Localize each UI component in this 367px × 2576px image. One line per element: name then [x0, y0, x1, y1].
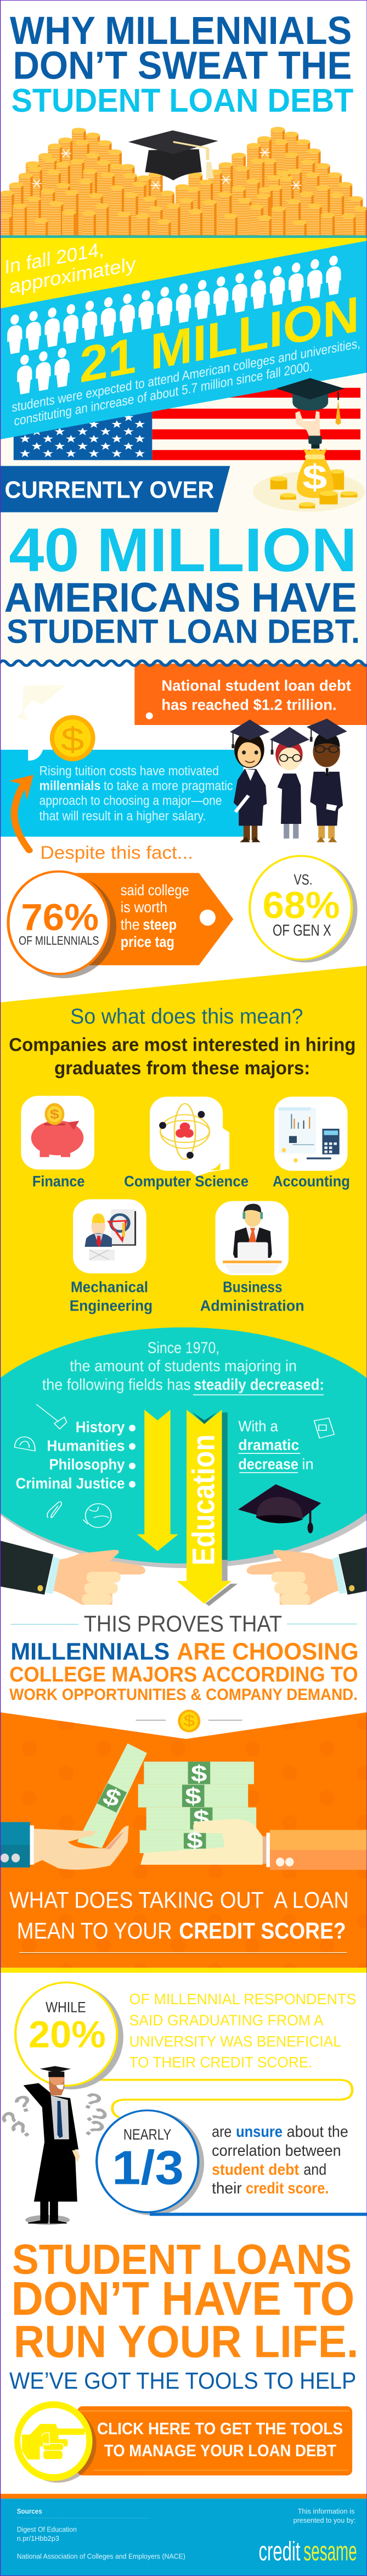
text: unsure about correlation: are — [212, 2123, 232, 2140]
stat: 76 percent tag: said college — [121, 882, 189, 899]
section: tuition and graduates — [0, 661, 367, 850]
teal dome — [0, 1328, 367, 1568]
icon: coin: $ — [61, 721, 84, 758]
stat: one third circle: 1/3 — [112, 2141, 184, 2195]
icons: outline doodles — [14, 1404, 334, 1527]
banner: currently over — [0, 466, 230, 512]
arrow: education — [177, 1410, 238, 1606]
text: of millennial respondents — [129, 1991, 356, 2071]
icon: rows of people — [7, 254, 341, 395]
icon: divider coin — [135, 1710, 242, 1732]
major: finance: Finance — [32, 1173, 84, 1190]
panel: rising tuition: millennials — [39, 778, 100, 793]
graduate three — [307, 718, 347, 842]
stat: 68 percent circle: 68% — [263, 884, 340, 926]
graduate one — [230, 720, 270, 842]
yellow diagonal band — [0, 238, 367, 309]
icon: graduation cap on coins — [128, 130, 218, 180]
text: since 1970 — [42, 1339, 324, 1395]
illustration: money exchange: $ — [187, 1828, 203, 1854]
illustration: confused graduate: ? — [76, 2115, 111, 2143]
major: finance: $ — [50, 1107, 59, 1122]
heading: so what does this mean — [9, 1004, 356, 1079]
stat: 76 percent tag: is worth — [121, 899, 167, 916]
illustration: left pointing hand — [0, 1531, 145, 1605]
illustration: money exchange: $ — [193, 1806, 210, 1832]
arrow: decreased fields — [137, 1410, 178, 1551]
stat: 76 percent tag: the — [121, 916, 140, 933]
text: with a dramatic decrease in: decrease — [238, 1456, 298, 1473]
illustration: money exchange: $ — [99, 1784, 125, 1812]
heading: student loans: DON’T HAVE TO — [11, 2272, 354, 2325]
text: in fall 2014: In fall 2014, — [5, 238, 104, 278]
stat: 20 percent circle — [15, 1982, 123, 2089]
graduate two — [270, 727, 309, 839]
illustration: confused graduate — [0, 2066, 114, 2225]
blue diagonal band — [0, 241, 367, 439]
major: mechanical engineering: Mechanical — [71, 1279, 148, 1296]
illustration: confused graduate: ? — [4, 2116, 39, 2144]
stat: one third circle: NEARLY — [123, 2126, 171, 2143]
illustration: confused graduate: ? — [77, 2087, 106, 2116]
text: unsure about correlation: student debt — [212, 2161, 299, 2178]
illustration: money bag and cap: $ — [302, 458, 327, 497]
panel: yellow majors section — [0, 966, 367, 1380]
major: computer science: Computer Science — [124, 1173, 249, 1190]
panel: national debt — [134, 663, 367, 725]
heading: millennials are choosing: MILLENNIALS — [10, 1638, 170, 1665]
text: with a dramatic decrease in — [238, 1418, 314, 1473]
section: despite this fact stats — [8, 843, 358, 978]
major: accounting — [273, 1097, 350, 1190]
illustration: confused graduate: ? — [77, 2103, 114, 2129]
text: unsure about correlation: credit score. — [246, 2179, 329, 2196]
text: with a dramatic decrease in: dramatic — [238, 1437, 299, 1453]
text: with a dramatic decrease in: With a — [238, 1418, 278, 1435]
heading: student loans — [11, 2236, 359, 2367]
stat: 76 percent tag: price tag — [121, 934, 174, 950]
title — [10, 9, 353, 119]
illustration: money exchange — [0, 1743, 367, 1870]
credit sesame logo: presented to you by: — [293, 2516, 356, 2524]
connector line — [100, 2080, 352, 2117]
illustration: money exchange: $ — [191, 1761, 207, 1787]
panel: rising tuition: Rising tuition costs have motivated — [39, 763, 219, 778]
american flag — [14, 388, 360, 460]
credit sesame logo — [258, 2507, 357, 2566]
button: click here: TO MANAGE YOUR LOAN DEBT — [104, 2442, 337, 2460]
panel: 21 million with flag — [0, 238, 367, 663]
section: title and coins — [1, 16, 367, 289]
footer — [0, 2494, 367, 2576]
list: decreased fields — [16, 1419, 135, 1492]
panel: rising tuition: that will result in a higher salary. — [39, 809, 206, 823]
stat: 68 percent circle — [250, 856, 358, 962]
arrow: orange curve — [9, 775, 33, 850]
heading: mean to your credit score: MEAN TO YOUR — [17, 1919, 172, 1944]
sources: n.pr/1Hbb2p3 — [17, 2534, 59, 2542]
icon: divider coin: $ — [184, 1712, 195, 1730]
illustration: three graduates — [230, 718, 347, 842]
text: of millennial respondents: TO THEIR CREDIT SCORE. — [129, 2054, 313, 2071]
major: computer science — [124, 1097, 249, 1190]
illustration: money exchange: $ — [185, 1784, 201, 1809]
text: despite this fact: Despite this fact... — [40, 843, 193, 863]
major: mechanical engineering: Engineering — [70, 1297, 153, 1314]
text: in fall 2014 — [5, 238, 136, 298]
credit sesame logo: This information is — [298, 2507, 355, 2515]
stat: one third circle — [97, 2110, 204, 2215]
stat: 76 percent tag: OF MILLENNIALS — [19, 934, 99, 947]
stat: 76 percent tag: steep — [143, 916, 177, 933]
text: in fall 2014: approximately — [9, 253, 136, 298]
heading: mean to your credit score — [17, 1919, 347, 1954]
stat: 68 percent circle: OF GEN X — [273, 922, 331, 939]
major: mechanical engineering — [70, 1199, 153, 1314]
cream background — [0, 348, 367, 663]
headline: 40 million americans — [4, 516, 360, 650]
icon: pointing hand — [22, 2424, 85, 2460]
arrow: education: Education — [186, 1435, 221, 1565]
banner: currently over: CURRENTLY OVER — [5, 476, 214, 503]
sources — [17, 2507, 185, 2561]
panel: rising tuition: approach to choosing a major—one — [39, 793, 222, 808]
stat: 20 percent circle: WHILE — [46, 1999, 86, 2015]
stat: 20 percent circle: 20% — [29, 2014, 106, 2055]
text: unsure about correlation — [212, 2123, 348, 2196]
panel: rising tuition — [0, 749, 244, 837]
list: decreased fields: Philosophy — [49, 1456, 125, 1473]
heading: student loans: STUDENT LOANS — [12, 2236, 352, 2283]
list: decreased fields: Criminal Justice — [16, 1475, 125, 1492]
major: business administration — [200, 1201, 304, 1314]
credit sesame logo: credit — [258, 2536, 301, 2566]
stat: 76 percent tag — [8, 872, 233, 978]
illustration: right pointing hand — [247, 1531, 367, 1605]
panel: rising tuition: to take a more pragmatic — [104, 778, 233, 793]
major: finance — [21, 1096, 94, 1190]
heading: millennials are choosing — [9, 1638, 359, 1704]
heading: student loans: RUN YOUR LIFE. — [14, 2316, 359, 2367]
panel: credit score orange section — [0, 1710, 367, 1973]
text: unsure about correlation: unsure — [236, 2123, 283, 2140]
sources: Sources — [17, 2507, 42, 2515]
section: fields decreased — [0, 1328, 367, 1637]
sources: National Association of Colleges and Employers (NACE) — [17, 2552, 185, 2561]
illustration: money bag and cap — [253, 378, 365, 512]
text: since 1970: the following fields has — [42, 1376, 191, 1393]
list: decreased fields: Humanities — [47, 1437, 125, 1454]
text: with a dramatic decrease in: in — [302, 1456, 314, 1473]
text: unsure about correlation: and — [303, 2161, 326, 2178]
heading: this proves that: THIS PROVES THAT — [84, 1612, 282, 1637]
stat: 76 percent tag: 76% — [21, 896, 99, 938]
major: business administration: Administration — [200, 1297, 304, 1314]
button: click here — [14, 2401, 352, 2483]
icon: coin — [50, 715, 95, 761]
text: tools to help: WE’VE GOT THE TOOLS TO HELP — [9, 2367, 356, 2394]
stat: 68 percent circle: VS. — [293, 872, 313, 888]
illustration: confused graduate: ? — [10, 2090, 38, 2118]
text: since 1970: the amount of students majoring in — [70, 1357, 297, 1375]
major: business administration: Business — [223, 1279, 283, 1296]
button: click here: CLICK HERE TO GET THE TOOLS — [97, 2420, 343, 2438]
icon: black cap — [238, 1484, 321, 1534]
text: since 1970: Since 1970, — [148, 1339, 219, 1356]
section: call to action and footer — [0, 2213, 367, 2576]
coin mountains — [0, 127, 367, 369]
text: unsure about correlation: their — [212, 2179, 242, 2196]
sources: Digest Of Education — [17, 2525, 77, 2533]
blue rule — [150, 2213, 367, 2216]
section: credit score stats — [0, 1982, 356, 2225]
list: decreased fields: History — [76, 1419, 125, 1435]
